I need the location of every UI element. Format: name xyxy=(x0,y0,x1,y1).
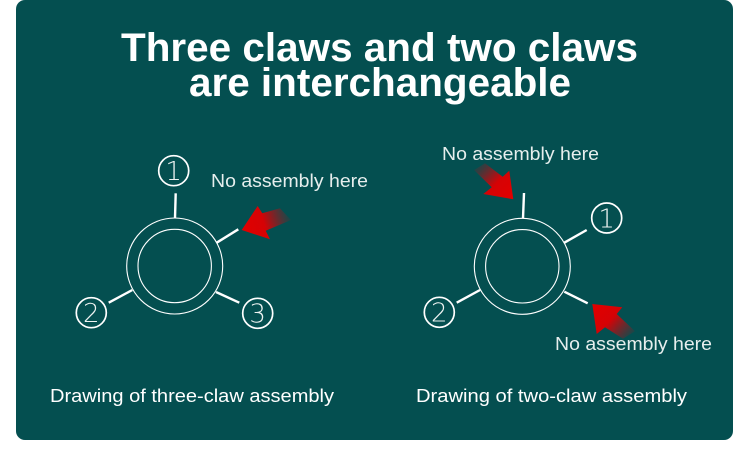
title: Three claws and two claws xyxy=(121,26,638,70)
label: no assembly here, bottom: No assembly here xyxy=(555,334,712,354)
marker: circled 3 xyxy=(243,298,273,330)
ring: outer and inner circles xyxy=(474,218,570,314)
marker: circled 1: 1 xyxy=(165,157,182,187)
marker: circled 2 xyxy=(424,297,454,329)
caption: two-claw: Drawing of two-claw assembly xyxy=(416,386,687,406)
arrow: red, pointing at lower right claw xyxy=(592,304,635,339)
arrow: red, pointing at top claw xyxy=(474,163,513,199)
claw lines xyxy=(109,193,239,303)
claw lines xyxy=(457,193,588,303)
caption: three-claw: Drawing of three-claw assembly xyxy=(50,386,334,406)
marker: circled 3: 3 xyxy=(249,300,266,330)
diagram: three-claw assembly xyxy=(76,156,368,330)
marker: circled 2: 2 xyxy=(431,299,448,329)
title xyxy=(121,26,638,105)
marker: circled 2 xyxy=(76,298,106,329)
label: no assembly here: No assembly here xyxy=(211,171,368,191)
arrow: red, pointing at unused claw xyxy=(242,206,291,239)
marker: circled 1: 1 xyxy=(598,204,615,234)
marker: circled 2: 2 xyxy=(83,299,100,329)
marker: circled 1 xyxy=(159,156,189,187)
label: no assembly here, top: No assembly here xyxy=(442,144,599,164)
diagram: two-claw assembly xyxy=(424,144,712,354)
title: are interchangeable xyxy=(189,61,571,105)
ring: outer and inner circles xyxy=(127,218,223,314)
marker: circled 1 xyxy=(592,203,622,234)
